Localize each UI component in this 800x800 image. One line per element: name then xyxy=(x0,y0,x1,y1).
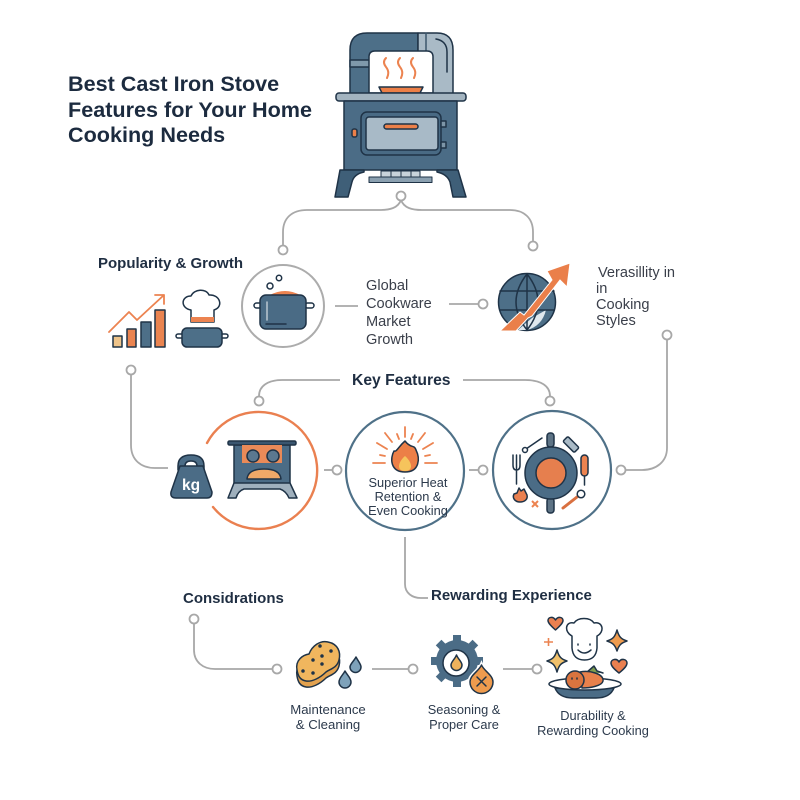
icon: gear with oil drop xyxy=(431,635,494,694)
panel: orange arc with stove xyxy=(207,412,317,529)
text: versatility in cooking styles: Styles xyxy=(596,313,636,329)
icon: kg weight: kg xyxy=(182,477,200,494)
text: versatility in cooking styles xyxy=(596,265,675,329)
icon: flame with rays xyxy=(373,427,437,472)
panel: superior heat retention: Superior Heat xyxy=(369,475,448,490)
connector: key features branches xyxy=(254,380,554,406)
connector: versatility to pan circle xyxy=(616,330,672,474)
title xyxy=(68,71,312,147)
text: global cookware market growth: Growth xyxy=(366,332,413,348)
text: seasoning and proper care: Proper Care xyxy=(429,717,499,732)
title: Cooking Needs xyxy=(68,122,225,147)
icon: chef hat and pot xyxy=(176,290,228,347)
icon: bar chart with arrow xyxy=(109,295,165,347)
text: maintenance and cleaning: Maintenance xyxy=(290,702,366,717)
text: durability and rewarding cooking: Rewarding Cooking xyxy=(537,723,649,738)
heading: key features: Key Features xyxy=(352,372,451,389)
panel: superior heat retention xyxy=(346,412,464,530)
text: seasoning and proper care xyxy=(428,702,501,732)
connector: stove to top nodes xyxy=(278,192,538,254)
text: versatility in cooking styles: Verasillity in xyxy=(598,265,675,281)
connector: heat circle to pan circle xyxy=(469,466,488,474)
text: global cookware market growth xyxy=(366,278,432,348)
panel: superior heat retention: Even Cooking xyxy=(368,503,448,518)
text: global cookware market growth: Market xyxy=(366,314,411,330)
text: durability and rewarding cooking: Durability & xyxy=(560,708,626,723)
panel: superior heat retention: Retention & xyxy=(375,489,442,504)
text: versatility in cooking styles: Cooking xyxy=(596,297,650,313)
connector: arc to heat circle xyxy=(324,466,342,474)
connector: popularity to weight xyxy=(126,366,168,468)
heading: popularity and growth: Popularity & Growth xyxy=(98,255,243,272)
icon: chef with dish xyxy=(547,617,627,698)
icon: cast iron stove xyxy=(335,33,466,197)
icon: small plus xyxy=(544,638,553,646)
connector: seasoning to durability xyxy=(503,664,542,674)
connector: heat to rewarding experience xyxy=(405,537,428,598)
text: maintenance and cleaning: & Cleaning xyxy=(296,717,360,732)
icon: sponge and drops xyxy=(297,642,361,688)
heading: considerations: Considrations xyxy=(183,590,284,607)
text: global cookware market growth: Cookware xyxy=(366,296,432,312)
panel: pan with utensils xyxy=(493,411,611,529)
connector: considerations to maintenance xyxy=(190,614,282,674)
icon: globe with arrow xyxy=(498,263,570,331)
title: Best Cast Iron Stove xyxy=(68,71,279,96)
connector: pot to global text xyxy=(335,305,358,307)
text: versatility in cooking styles: in xyxy=(596,281,607,297)
icon: kg weight xyxy=(171,455,212,498)
text: durability and rewarding cooking xyxy=(537,708,649,738)
text: maintenance and cleaning xyxy=(290,702,366,732)
heading: rewarding experience: Rewarding Experience xyxy=(431,587,592,604)
text: seasoning and proper care: Seasoning & xyxy=(428,702,501,717)
title: Features for Your Home xyxy=(68,97,312,122)
connector: global text to globe xyxy=(449,300,488,308)
connector: maintenance to seasoning xyxy=(372,664,418,674)
text: global cookware market growth: Global xyxy=(366,278,408,294)
panel: pot circle xyxy=(242,265,324,347)
